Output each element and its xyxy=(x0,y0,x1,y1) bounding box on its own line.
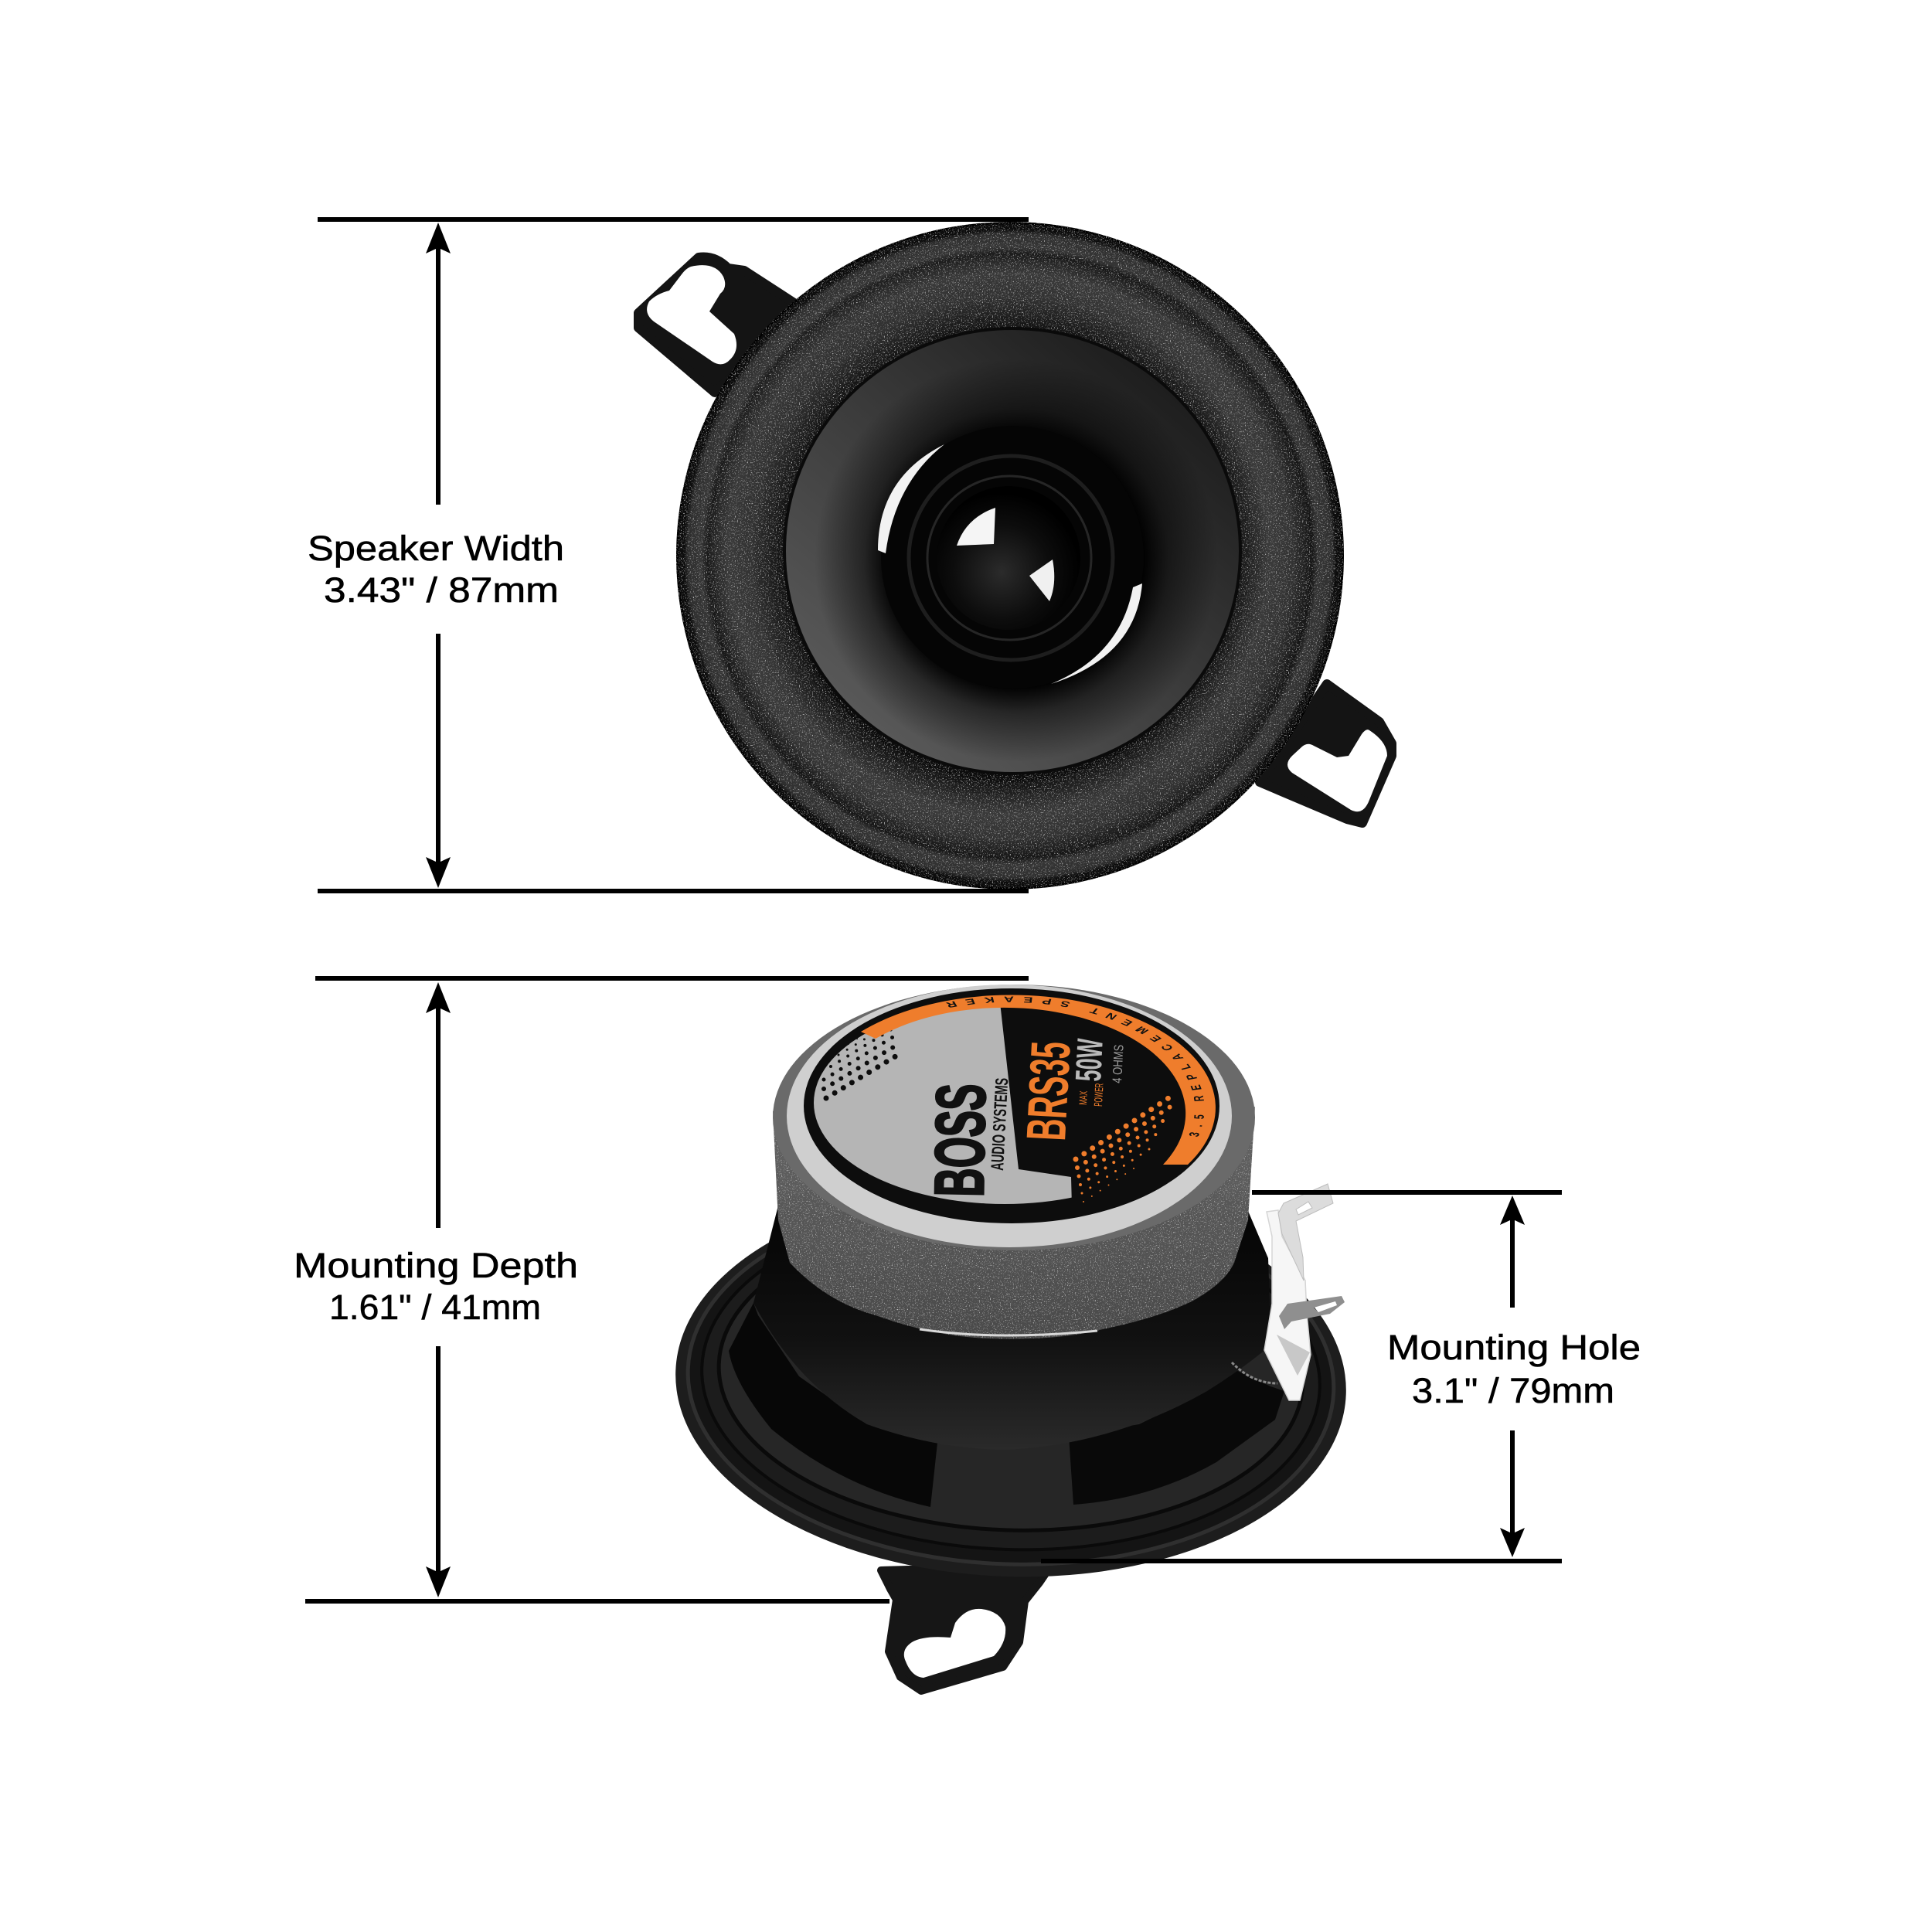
cone xyxy=(784,328,1240,774)
flange ridge highlight xyxy=(682,1185,1340,1575)
silver rim xyxy=(787,985,1232,1247)
halftone black dots xyxy=(824,1024,902,1098)
max label: MAX xyxy=(1077,1090,1090,1105)
dimension lines: speaker width xyxy=(308,217,1029,893)
top speaker front view xyxy=(638,222,1392,889)
basket flange xyxy=(669,1177,1352,1588)
wattage: 50W xyxy=(1067,1037,1111,1083)
label gray area xyxy=(814,1008,1072,1204)
arrow: down xyxy=(426,1346,451,1597)
ear body bottom xyxy=(881,1566,1051,1691)
label disc xyxy=(804,988,1219,1223)
orange arc band xyxy=(861,995,1216,1165)
flange ridge outer xyxy=(696,1196,1326,1560)
tweeter waveguide ring xyxy=(927,476,1091,640)
magnet side xyxy=(773,1107,1255,1338)
terminal white board xyxy=(1264,1210,1311,1400)
icon: upper-left mounting ear xyxy=(638,257,804,393)
dome highlight left xyxy=(957,508,995,546)
speaker outer frame and foam surround xyxy=(676,222,1344,889)
model number: BRS35 xyxy=(1015,1040,1083,1142)
magnet top plate xyxy=(773,985,1255,1250)
bottom extension line xyxy=(1041,1559,1562,1563)
arrow: down xyxy=(1500,1430,1525,1557)
label: mounting depth xyxy=(294,1246,578,1327)
curved label text: 3.5 REPLACEMENT SPEAKER xyxy=(946,997,1204,1137)
top extension line xyxy=(315,976,1029,981)
label line one: Mounting Depth xyxy=(294,1246,578,1285)
ohms: 4 OHMS xyxy=(1110,1044,1127,1083)
label line two: 3.43" / 87mm xyxy=(324,570,559,610)
label line two: 3.1" / 79mm xyxy=(1412,1371,1614,1410)
power label: POWER xyxy=(1092,1083,1107,1107)
label line one: Mounting Hole xyxy=(1387,1328,1641,1367)
ear keyhole upper left xyxy=(647,265,736,364)
terminal solder pad xyxy=(1277,1335,1310,1376)
label line two: 1.61" / 41mm xyxy=(329,1287,541,1327)
bottom extension line xyxy=(305,1599,889,1604)
top extension line xyxy=(318,217,1029,222)
label: speaker width xyxy=(308,529,564,610)
icon: bottom mounting ear xyxy=(881,1566,1051,1691)
left basket window xyxy=(729,1303,937,1507)
bottom speaker rear view xyxy=(675,985,1346,1695)
brand subtitle: AUDIO SYSTEMS xyxy=(987,1077,1012,1171)
terminal wire xyxy=(1232,1362,1277,1383)
tweeter inner ring xyxy=(909,456,1113,660)
ear body lower right xyxy=(1260,684,1392,823)
label black base xyxy=(804,988,1219,1223)
arrow: up xyxy=(1500,1196,1525,1308)
dimension lines: mounting depth xyxy=(294,976,1029,1604)
cone shadow around tweeter xyxy=(788,338,1244,783)
infographic canvas xyxy=(297,217,1640,1695)
arrow: up xyxy=(426,982,451,1228)
flange ridge inner xyxy=(713,1208,1308,1540)
icon: lower-right mounting ear xyxy=(1260,684,1392,823)
terminal lower lug xyxy=(1279,1296,1345,1329)
label line one: Speaker Width xyxy=(308,529,564,568)
magnet underside silver edge xyxy=(920,1329,1097,1335)
right basket window xyxy=(1069,1367,1284,1505)
tweeter housing xyxy=(881,426,1144,689)
tweeter highlight: lower right xyxy=(1051,583,1142,684)
tweeter highlight: upper left xyxy=(878,444,944,553)
brand logo: BOSS xyxy=(921,1083,1001,1197)
top extension line xyxy=(1252,1190,1562,1195)
bottom extension line xyxy=(318,889,1029,893)
terminal upper lug xyxy=(1278,1184,1333,1281)
ear body upper left xyxy=(638,257,804,393)
arrow: up xyxy=(426,223,451,505)
label: mounting hole xyxy=(1387,1328,1641,1410)
dimension lines: mounting hole xyxy=(1041,1190,1641,1563)
ear keyhole lower right xyxy=(1287,730,1387,811)
halftone orange dots xyxy=(1076,1095,1173,1202)
basket motor cup xyxy=(753,1206,1271,1450)
arrow: down xyxy=(426,634,451,888)
surround light sheen xyxy=(725,269,1269,813)
ear keyhole bottom xyxy=(904,1609,1005,1678)
dome highlight right xyxy=(1029,560,1054,601)
tweeter dome xyxy=(937,486,1080,630)
